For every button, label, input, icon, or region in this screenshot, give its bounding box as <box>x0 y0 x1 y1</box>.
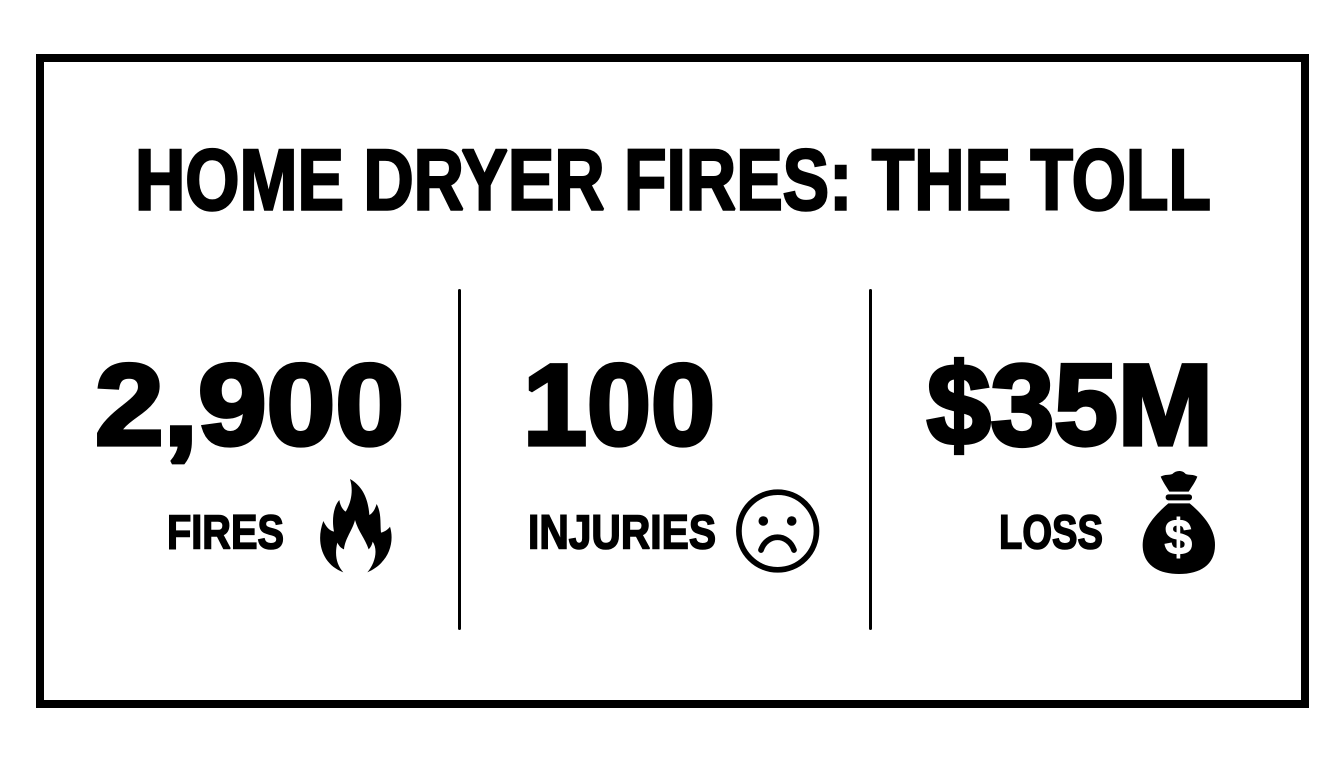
number: fires: 2,900 <box>95 342 404 470</box>
label: injuries: INJURIES <box>528 506 716 560</box>
panel: loss <box>927 342 1215 574</box>
label: loss: LOSS <box>999 506 1103 560</box>
icon: money bag <box>1143 471 1215 574</box>
panel: fires <box>95 342 404 572</box>
icon: flame <box>320 479 392 572</box>
panel: injuries <box>523 342 816 570</box>
label: fires: FIRES <box>167 506 284 560</box>
icon: sad face <box>739 492 816 570</box>
divider left <box>458 289 461 630</box>
number: loss: $35M <box>927 342 1213 470</box>
outer frame <box>40 58 1305 704</box>
divider right <box>869 289 872 630</box>
number: injuries: 100 <box>523 342 715 470</box>
dollar sign: $ <box>1164 509 1192 565</box>
